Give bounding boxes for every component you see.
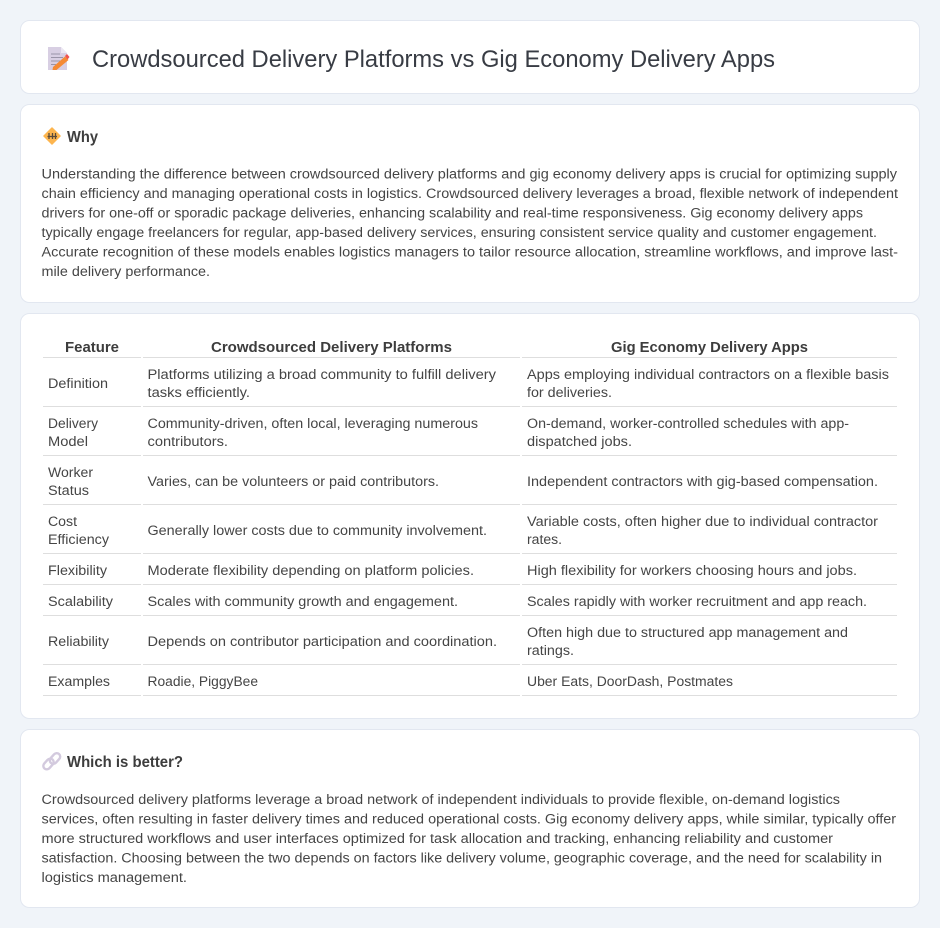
table row: cost efficiency [43, 514, 897, 554]
title: Crowdsourced Delivery Platforms vs Gig Economy Delivery Apps [92, 46, 775, 73]
panel: why [20, 104, 920, 302]
table row: delivery model: Delivery [48, 416, 99, 432]
table row: cost efficiency: Efficiency [48, 532, 110, 548]
table row: cost efficiency: rates. [527, 532, 562, 548]
table row: definition: for deliveries. [527, 385, 612, 401]
table row: definition: Definition [48, 376, 108, 392]
table header row: Feature [65, 340, 119, 356]
table row: worker status: Worker [48, 465, 93, 481]
table row: worker status: Independent contractors with gig-based compensation. [527, 474, 878, 490]
icon: orange diamond sign [44, 128, 60, 144]
panel: title header [20, 20, 920, 94]
text block: why paragraph: Accurate recognition of these models enables logistics managers to tailor resource allocation, streamline workflows, and improve last- [42, 244, 898, 260]
text block: why paragraph: typically engage freelancers for regular, app-based delivery services, ensuring consistent service quality and customer engagement. [42, 225, 877, 241]
table row: flexibility: Moderate flexibility depending on platform policies. [148, 563, 474, 579]
table row: reliability: Reliability [48, 634, 110, 650]
icon: chain link [42, 752, 62, 771]
text block: which is better paragraph: logistics management. [42, 870, 187, 886]
table row: reliability: ratings. [527, 643, 574, 659]
table row: flexibility [43, 563, 897, 585]
table header row [43, 340, 897, 358]
text block: why paragraph [42, 166, 898, 280]
table row: definition: Apps employing individual contractors on a flexible basis [527, 367, 889, 383]
table row: delivery model: Community-driven, often local, leveraging numerous [148, 416, 478, 432]
table row: definition [43, 367, 897, 407]
table row: worker status [43, 465, 897, 505]
table row: examples: Roadie, PiggyBee [148, 674, 258, 690]
text block: which is better paragraph: satisfaction. Choosing between the two depends on factors like delivery volume, geographic coverage, and the need for scalability in [42, 850, 882, 866]
text block: which is better paragraph: services, often resulting in faster delivery times and reduced operational costs. Gig economy delivery apps, while similar, typically offer [42, 812, 896, 828]
table row: cost efficiency: Generally lower costs due to community involvement. [148, 523, 487, 539]
table row: scalability [43, 594, 897, 616]
table row: worker status: Status [48, 483, 89, 499]
text block: why paragraph: Understanding the difference between crowdsourced delivery platforms and gig economy delivery apps is crucial for optimizing supply [42, 166, 898, 182]
table row: delivery model: dispatched jobs. [527, 434, 632, 450]
table row: delivery model [43, 416, 897, 456]
table row: reliability: Depends on contributor participation and coordination. [148, 634, 497, 650]
heading: why: Why [67, 129, 98, 146]
table row: scalability: Scales rapidly with worker recruitment and app reach. [527, 594, 867, 610]
text block: which is better paragraph [42, 792, 896, 886]
icon: document with pencil [48, 47, 70, 70]
table row: delivery model: contributors. [148, 434, 228, 450]
table header row: Crowdsourced Delivery Platforms [211, 340, 452, 356]
table row: flexibility: Flexibility [48, 563, 108, 579]
table row: flexibility: High flexibility for workers choosing hours and jobs. [527, 563, 857, 579]
table row: examples [43, 674, 897, 696]
table row: worker status: Varies, can be volunteers or paid contributors. [148, 474, 439, 490]
table row: scalability: Scalability [48, 594, 114, 610]
heading: which is better: Which is better? [67, 754, 183, 771]
table header row: Gig Economy Delivery Apps [611, 340, 808, 356]
text block: which is better paragraph: more structured workflows and user interfaces optimized for task allocation and tracking, enhancing reliability and customer [42, 831, 833, 847]
table row: definition: tasks efficiently. [148, 385, 250, 401]
text block: why paragraph: drivers for one-off or sporadic package deliveries, enhancing scalability and real-time responsiveness. Gig economy delivery apps [42, 206, 863, 222]
table row: cost efficiency: Variable costs, often higher due to individual contractor [527, 514, 878, 530]
table row: examples: Examples [48, 674, 110, 690]
table row: reliability [43, 625, 897, 665]
text block: why paragraph: mile delivery performance. [42, 264, 210, 280]
table row: examples: Uber Eats, DoorDash, Postmates [527, 674, 733, 690]
panel: which is better [20, 730, 920, 908]
text block: which is better paragraph: Crowdsourced delivery platforms leverage a broad network of independent individuals to provide flexible, on-demand logistics [42, 792, 840, 808]
text block: why paragraph: chain efficiency and managing operational costs in logistics. Crowdsourced delivery leverages a broad, flexible network of independent [42, 186, 898, 202]
table row: delivery model: Model [48, 434, 88, 450]
table row: scalability: Scales with community growth and engagement. [148, 594, 458, 610]
table row: definition: Platforms utilizing a broad community to fulfill delivery [148, 367, 497, 383]
table row: reliability: Often high due to structured app management and [527, 625, 848, 641]
panel: comparison table [20, 314, 920, 718]
table row: cost efficiency: Cost [48, 514, 77, 530]
table row: delivery model: On-demand, worker-controlled schedules with app- [527, 416, 849, 432]
